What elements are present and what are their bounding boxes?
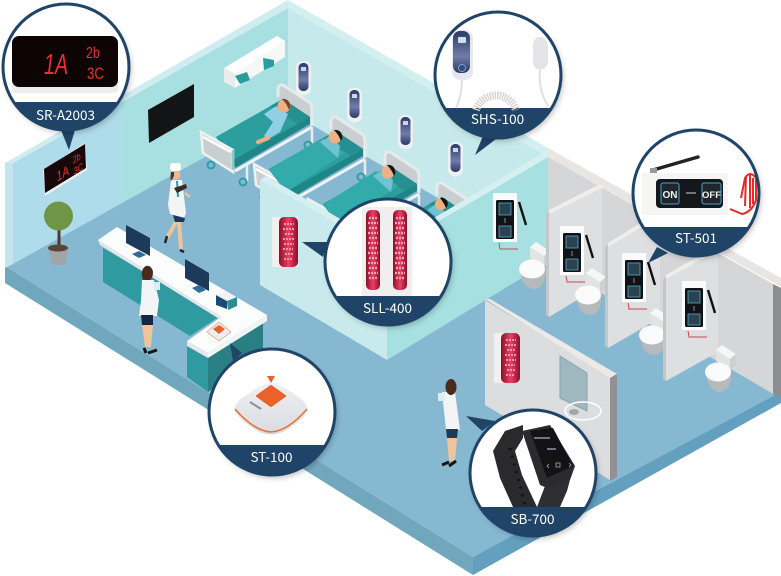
callout: SR-A2003: SR-A2003 <box>36 104 95 124</box>
product: handset and cord <box>452 30 548 110</box>
product: signal light <box>362 207 412 296</box>
small call button <box>207 322 231 341</box>
callout: SB-700 <box>466 410 600 547</box>
product: call button <box>235 376 307 434</box>
ST-501 wall panels on ward wall <box>493 193 526 249</box>
desk monitors <box>126 225 209 293</box>
wall TV <box>148 84 194 143</box>
books <box>216 291 237 310</box>
callout: SLL-400: SLL-400 <box>363 297 412 317</box>
callout: ST-100 <box>205 343 339 485</box>
wall shelf <box>224 36 285 88</box>
ward partition wall <box>260 150 548 360</box>
callout: SB-700: SB-700 <box>510 508 555 528</box>
front wash wall <box>485 299 617 481</box>
callout: SHS-100 <box>430 12 566 155</box>
toilet area back wall <box>548 148 781 398</box>
callout: SHS-100: SHS-100 <box>471 108 524 128</box>
wall display: 3C <box>74 160 83 177</box>
lobby and ward walls <box>5 0 548 268</box>
wall display <box>43 143 87 196</box>
product: pull cord switch: ON <box>662 190 678 201</box>
wall call handsets <box>296 61 463 180</box>
nurse at reception desk <box>139 266 160 353</box>
callout: SLL-400 <box>302 199 454 336</box>
wall display: 2b <box>73 150 81 166</box>
callout: ST-501: ST-501 <box>675 227 717 247</box>
potted plant <box>44 202 73 265</box>
product: pull cord switch <box>642 157 756 215</box>
callout: ST-100: ST-100 <box>251 446 292 466</box>
hospital beds with patients <box>201 85 471 283</box>
product: display board <box>12 36 118 93</box>
wall signal lamp <box>272 217 298 267</box>
product: display board: 3C <box>87 65 104 83</box>
callout: SR-A2003 <box>0 4 132 150</box>
product: display board: 2b <box>86 45 100 62</box>
wall display: 1A <box>56 161 69 185</box>
reception desk <box>98 225 267 392</box>
toilet stalls <box>519 184 736 392</box>
nurse walking with clipboard <box>165 163 190 252</box>
callout: ST-501 <box>630 130 762 267</box>
nurse near wash wall <box>438 379 460 466</box>
product: pull cord switch: OFF <box>702 190 721 201</box>
product: wrist watch <box>493 425 575 507</box>
product: display board: 1A <box>42 48 70 81</box>
